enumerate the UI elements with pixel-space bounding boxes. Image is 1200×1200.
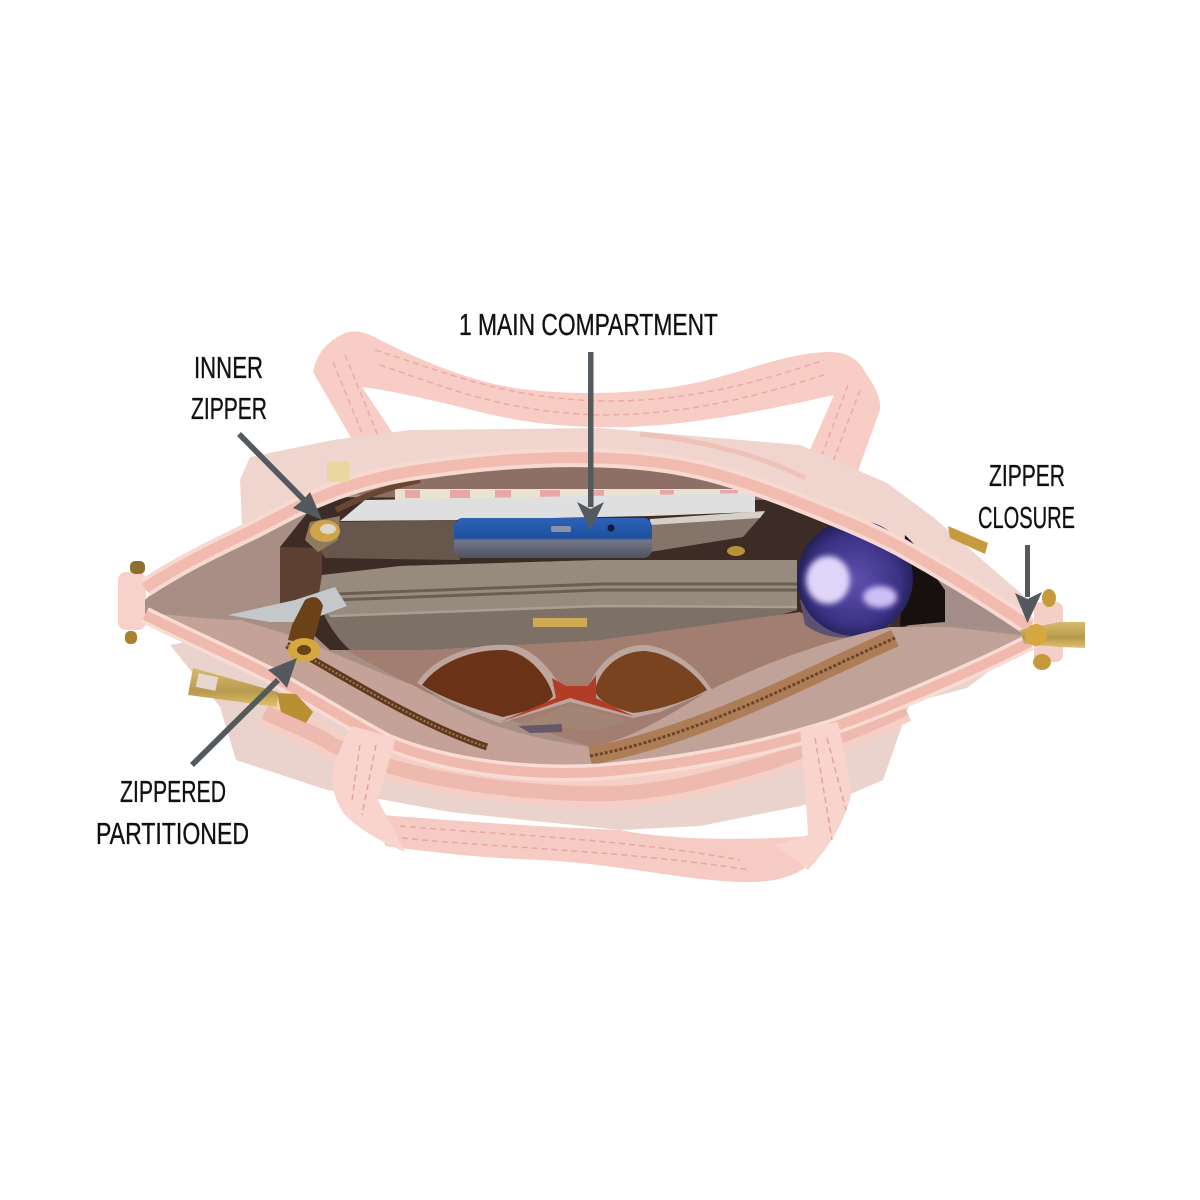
dark inner compartment	[280, 497, 945, 650]
front pocket left	[147, 613, 600, 773]
side tabs	[118, 561, 1063, 670]
label: zipper closure	[978, 458, 1075, 535]
label: zippered partitioned: PARTITIONED	[96, 816, 249, 851]
phone	[454, 518, 652, 558]
front pocket right	[600, 627, 1028, 772]
receipt tag	[228, 587, 347, 622]
back zipper seam	[640, 434, 805, 478]
arrow: partitioned	[190, 658, 297, 767]
notebook	[310, 489, 765, 560]
arrow: zipper closure	[1015, 545, 1042, 623]
front handle	[332, 722, 852, 882]
bag back body	[240, 428, 1040, 610]
back hardware	[327, 462, 988, 554]
sunglasses	[417, 645, 712, 733]
back handle	[313, 332, 880, 490]
arrow: inner zipper	[237, 432, 322, 520]
top lining	[340, 461, 790, 500]
outer zipper pull	[188, 668, 313, 723]
label: main compartment: 1 MAIN COMPARTMENT	[459, 307, 718, 342]
wallet	[318, 560, 797, 650]
inner zipper pull	[305, 516, 340, 552]
blue tin	[797, 520, 913, 638]
closure zipper pull	[1020, 622, 1085, 648]
label: zippered partitioned	[96, 774, 249, 851]
lower crumpled lining	[345, 612, 890, 750]
main zipper upper	[145, 458, 1030, 627]
label: inner zipper: ZIPPER	[191, 391, 267, 426]
label: zipper closure: CLOSURE	[978, 500, 1075, 535]
right lining	[920, 555, 1026, 626]
dark gap right of tin	[900, 535, 945, 626]
small gold ring	[727, 546, 745, 556]
inner zipper tape	[287, 480, 895, 756]
bag interior lining	[145, 458, 1030, 773]
partitioned zipper pull	[288, 597, 323, 662]
label: zipper closure: ZIPPER	[989, 458, 1065, 493]
label: inner zipper: INNER	[194, 350, 263, 385]
left lining	[150, 520, 280, 616]
label: zippered partitioned: ZIPPERED	[120, 774, 226, 809]
label: inner zipper	[191, 350, 267, 426]
bag front body	[170, 620, 1030, 830]
arrow: main compartment	[577, 352, 604, 530]
main zipper lower	[145, 615, 1030, 794]
